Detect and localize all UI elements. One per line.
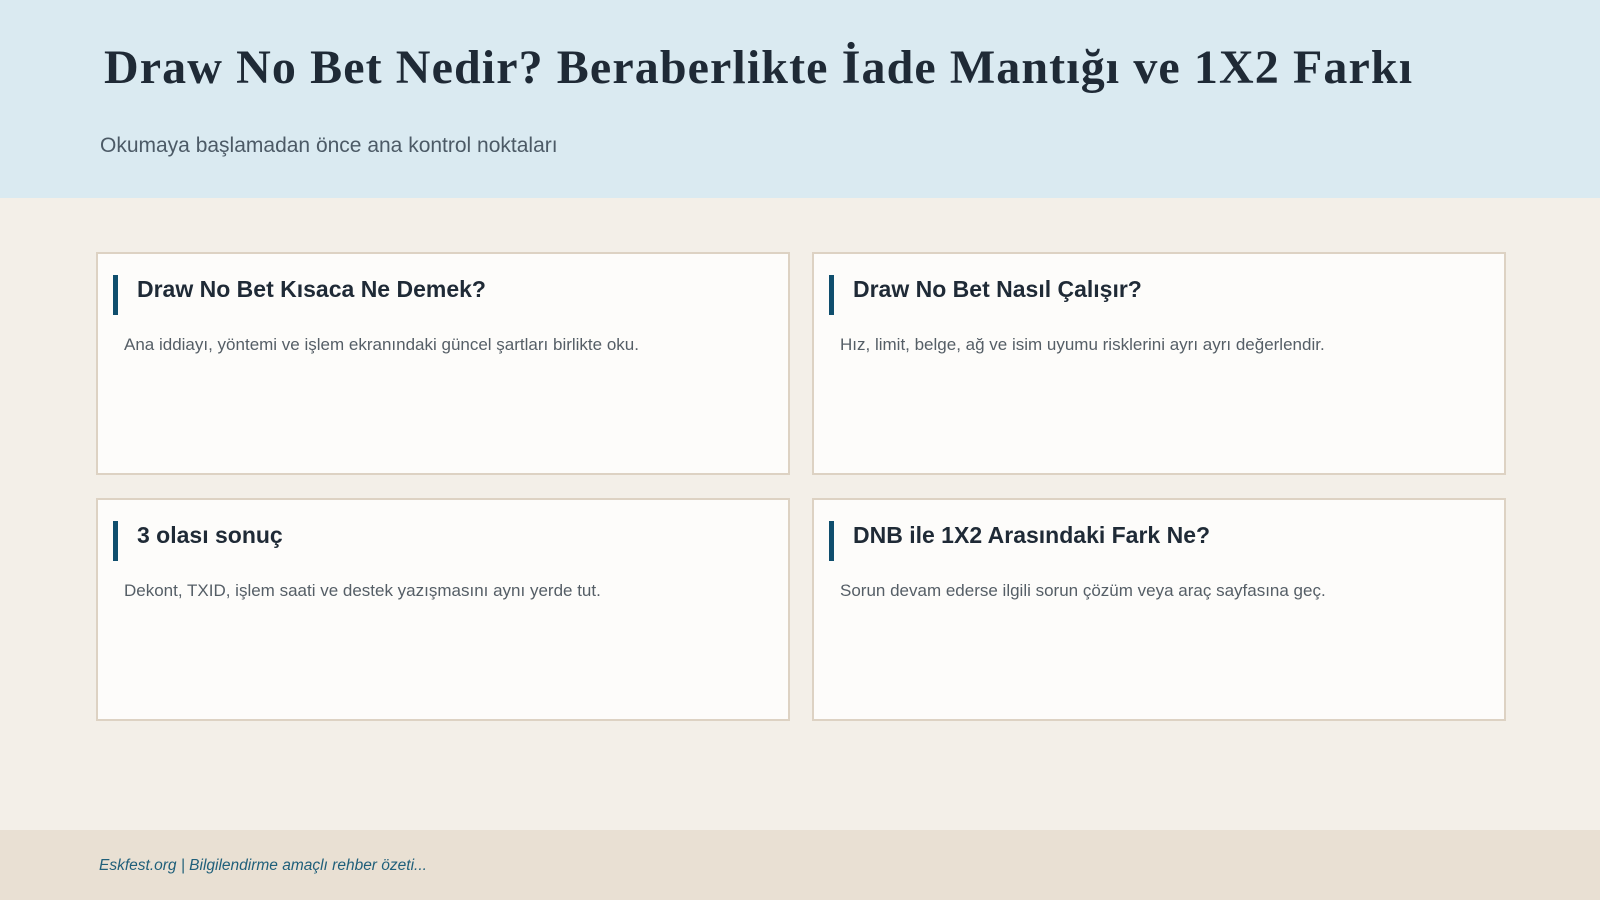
panel: 3 olası sonuç — [96, 498, 790, 721]
text: Sorun devam ederse ilgili sorun çözüm veya araç sayfasına geç. — [840, 581, 1326, 600]
subtitle: Okumaya başlamadan önce ana kontrol noktaları — [100, 134, 558, 157]
heading: DNB ile 1X2 Arasındaki Fark Ne? — [853, 522, 1210, 548]
panel: fark — [812, 498, 1506, 721]
footer — [0, 830, 1600, 900]
footer: Eskfest.org | Bilgilendirme amaçlı rehber özeti... — [99, 857, 427, 874]
heading: Draw No Bet Nasıl Çalışır? — [853, 276, 1142, 302]
panel: kısaca — [96, 252, 790, 475]
text: Ana iddiayı, yöntemi ve işlem ekranındaki güncel şartları birlikte oku. — [124, 335, 639, 354]
text: Hız, limit, belge, ağ ve isim uyumu risklerini ayrı ayrı değerlendir. — [840, 335, 1325, 354]
panel: nasıl çalışır — [812, 252, 1506, 475]
title: Draw No Bet Nedir? Beraberlikte İade Mantığı ve 1X2 Farkı — [104, 41, 1413, 94]
heading: Draw No Bet Kısaca Ne Demek? — [137, 276, 486, 302]
heading: 3 olası sonuç — [137, 522, 283, 548]
text: Dekont, TXID, işlem saati ve destek yazışmasını aynı yerde tut. — [124, 581, 601, 600]
header band — [0, 0, 1600, 198]
